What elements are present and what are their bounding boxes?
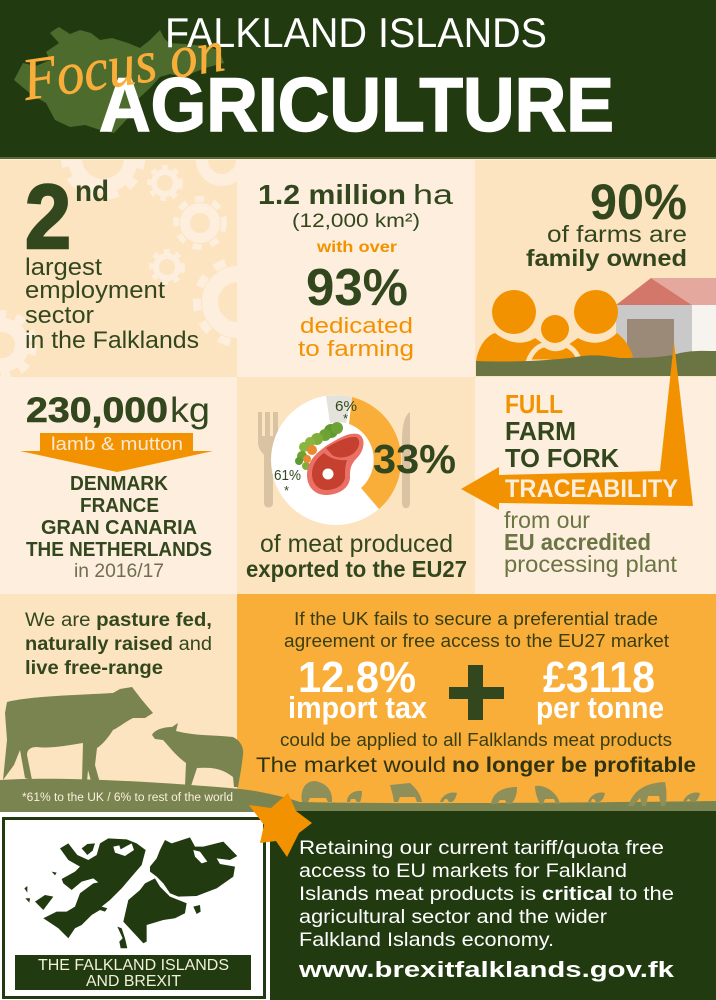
label: 6%: 6% [335, 398, 357, 415]
text: no longer profitable: no longer be profitable [452, 754, 696, 777]
text: retaining access: Falkland Islands economy. [299, 929, 554, 951]
text: dedicated to farming: dedicated [300, 313, 413, 338]
label: 6%: * [343, 411, 348, 426]
text: 1.2 million ha: ha [413, 179, 454, 210]
stat: per tonne: £3118 [543, 653, 655, 702]
text: if the UK fails: If the UK fails to secure a preferential trade [294, 609, 658, 629]
text: retaining access [299, 837, 674, 951]
text: no longer profitable [256, 754, 696, 777]
text: of farms are family owned: family owned [526, 245, 687, 271]
text: if the UK fails [284, 609, 669, 651]
text: of meat produced exported [246, 530, 467, 582]
ground strip [0, 779, 716, 812]
text: dedicated to farming: to farming [298, 336, 414, 361]
big number: 2nd: 2 [25, 167, 71, 268]
panel: family owned [475, 160, 716, 377]
text: export countries: DENMARK [70, 473, 169, 495]
icon: vegetables [295, 422, 343, 470]
text: largest employment sector [25, 254, 199, 354]
label: 6% [335, 398, 357, 426]
text: largest employment sector: in the Falklands [25, 327, 199, 354]
panel: header [0, 0, 716, 159]
icon: star [249, 793, 312, 857]
icon: islands silhouette [14, 27, 224, 133]
text: traceability: TRACEABILITY [505, 475, 678, 503]
title: Focus on: Focus on [17, 18, 229, 113]
text: retaining access: Islands meat products is critical to the [299, 883, 674, 905]
panel: map logo [0, 812, 270, 1000]
label: the Falkland Islands and Brexit [15, 955, 251, 990]
panel: land area [237, 160, 475, 377]
stat: per tonne: per tonne [536, 690, 664, 725]
icon: family [476, 290, 634, 362]
ground [476, 351, 716, 376]
big number: 90%: 90% [590, 174, 687, 230]
icon: farmhouse [616, 278, 716, 359]
text: largest employment sector: employment [25, 277, 165, 304]
text: export countries [26, 473, 212, 561]
big number: 230,000kg: 230,000 [26, 391, 168, 430]
big number: 2nd [25, 167, 109, 268]
panel: trade warning [237, 594, 716, 809]
text: of farms are family owned [526, 221, 687, 271]
stat: import tax: import tax [288, 690, 428, 725]
stat: import tax: 12.8% [298, 653, 416, 702]
text: full farm to fork: FULL [505, 389, 563, 419]
text: no longer profitable: The market would [256, 754, 446, 777]
text: 1.2 million ha [258, 179, 454, 232]
text: pasture fed [25, 610, 212, 679]
text: retaining access: access to EU markets for Falkland [299, 860, 627, 882]
arrow: lamb and mutton [20, 433, 213, 472]
arrow: farm to fork [461, 342, 693, 510]
label: the Falkland Islands and Brexit: THE FALKLAND ISLANDS [38, 957, 229, 974]
panel: lamb and mutton [0, 377, 237, 594]
text: pasture fed: naturally raised and [25, 634, 212, 655]
text: from our EU accredited processing plant: processing plant [504, 551, 678, 577]
icon: knife [402, 412, 410, 508]
text: retaining access: agricultural sector and the wider [299, 906, 608, 928]
big number: 230,000kg [26, 391, 210, 430]
panel: traceability [461, 342, 716, 594]
icon: plus [449, 665, 504, 720]
stat: import tax [288, 653, 428, 725]
label: 61%: * [284, 483, 289, 498]
text: largest employment sector: sector [25, 302, 94, 329]
text: export countries: GRAN CANARIA [41, 517, 197, 539]
icon: steak [307, 434, 364, 495]
icon: fork [258, 412, 278, 508]
text: full farm to fork: FARM [505, 416, 576, 446]
text: from our EU accredited processing plant [504, 507, 678, 577]
icon: map of the Falkland Islands [24, 837, 237, 948]
text: from our EU accredited processing plant: from our [504, 507, 590, 533]
text: pasture fed: We are pasture fed, [25, 610, 212, 631]
text: from our EU accredited processing plant: EU accredited [504, 529, 651, 555]
title: Agriculture: AGRICULTURE [99, 63, 614, 148]
big number: 2nd: nd [75, 175, 109, 208]
text: 1.2 million ha: 1.2 million [258, 179, 406, 210]
text: could be applied: could be applied to all Falklands meat products [280, 730, 672, 750]
title: Falkland Islands: FALKLAND ISLANDS [165, 9, 547, 56]
label: 61% [274, 467, 301, 498]
text: footnote: *61% to the UK / 6% to rest of the world [22, 792, 233, 804]
icon: cow [3, 687, 153, 785]
big number: 230,000kg: kg [170, 391, 210, 430]
text: largest employment sector: largest [25, 254, 102, 281]
arrow: lamb and mutton: lamb & mutton [51, 434, 183, 454]
text: export countries: FRANCE [80, 495, 159, 517]
text: full farm to fork [505, 389, 619, 473]
text: pasture fed: live free-range [25, 658, 163, 679]
panel: retaining access [270, 811, 716, 1000]
text: of farms are family owned: of farms are [547, 221, 687, 247]
text: dedicated to farming [298, 313, 414, 361]
label: 61%: 61% [274, 467, 301, 484]
text: of meat produced exported: of meat produced [260, 530, 453, 558]
big number: 93%: 93% [306, 259, 408, 317]
panel: pasture fed [0, 594, 237, 794]
text: retaining access: Retaining our current tariff/quota free [299, 837, 664, 859]
text: in 2016/17: in 2016/17 [74, 561, 164, 582]
stat: per tonne [536, 653, 664, 725]
text: full farm to fork: TO FORK [505, 443, 619, 473]
icon: grazing animals [302, 781, 700, 806]
big number: 33%: 33% [373, 436, 456, 482]
text: website: www.brexitfalklands.gov.fk [298, 957, 675, 982]
text: export countries: THE NETHERLANDS [26, 539, 212, 561]
panel: meat exports [237, 377, 475, 594]
text: with over: with over [316, 239, 397, 256]
label: the Falkland Islands and Brexit: AND BREXIT [86, 973, 182, 990]
text: of meat produced exported: exported to the EU27 [246, 556, 467, 582]
panel: employment sector [0, 160, 237, 377]
chart: plate [271, 395, 401, 525]
text: if the UK fails: agreement or free access to the EU27 market [284, 631, 669, 651]
icon: sheep [152, 723, 243, 787]
text: 1.2 million ha: (12,000 km²) [292, 211, 420, 232]
